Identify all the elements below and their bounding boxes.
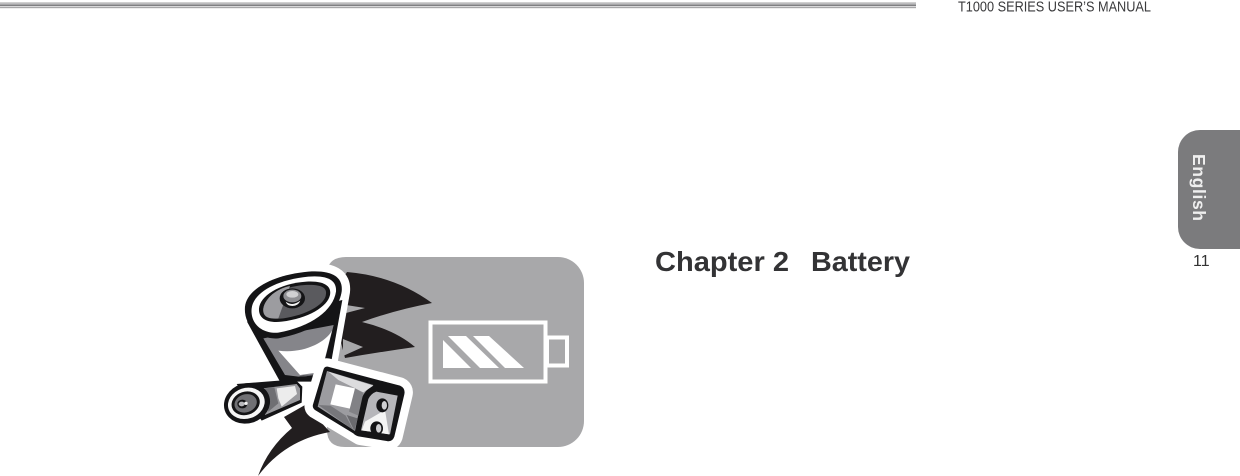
battery halo <box>245 271 342 380</box>
tab label: English <box>1189 154 1209 221</box>
battery body outline <box>247 300 342 382</box>
chapter title: Battery <box>811 246 910 277</box>
page number: 11 <box>1193 253 1210 270</box>
battery outline <box>313 367 405 441</box>
icon: speed flames <box>258 272 432 476</box>
chapter title <box>655 246 910 277</box>
battery illustration <box>219 257 584 476</box>
icon: large battery <box>245 271 342 382</box>
panel: grey background <box>327 257 584 447</box>
chapter title: Chapter 2 <box>655 246 789 277</box>
icon: battery level indicator <box>430 322 567 382</box>
icon: small battery <box>219 377 302 430</box>
battery halo <box>313 367 405 441</box>
language tab <box>1178 130 1240 249</box>
icon: nine volt battery <box>313 367 405 441</box>
